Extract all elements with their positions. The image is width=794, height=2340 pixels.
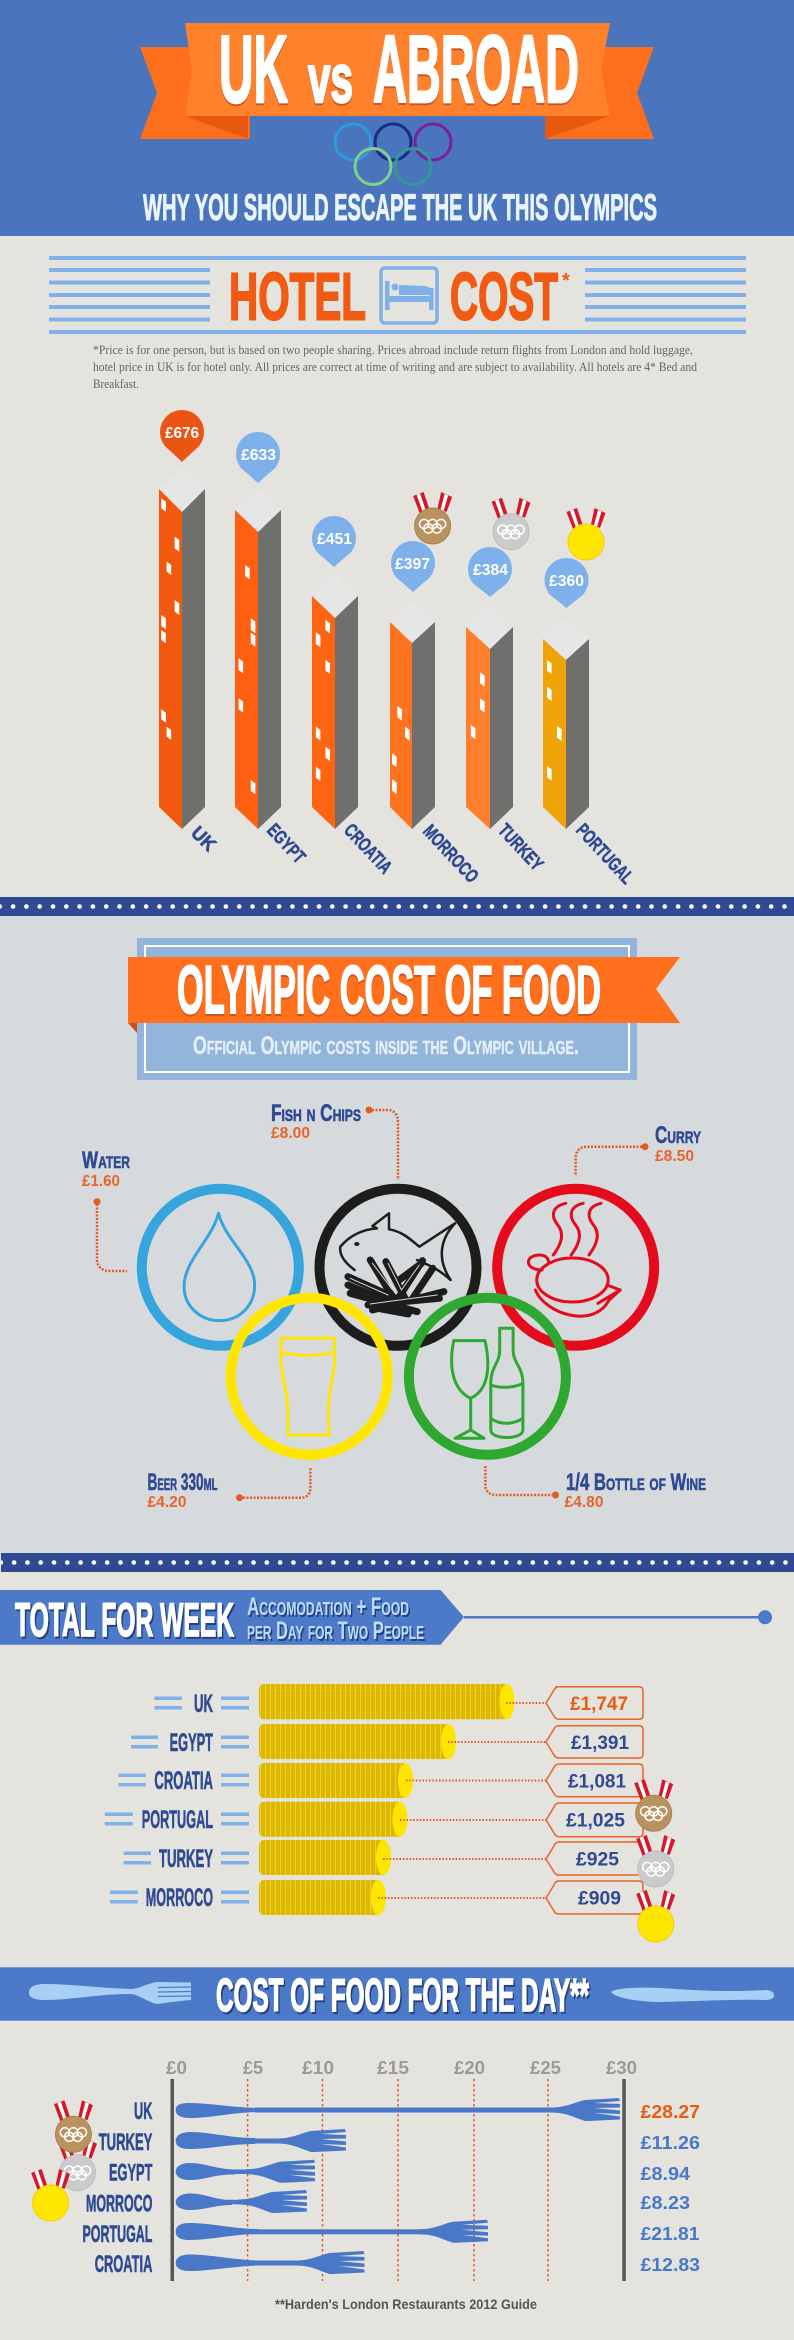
callout line: beer xyxy=(236,1468,310,1501)
axis labels: £30 xyxy=(606,2058,637,2078)
row: Morroco: £909 xyxy=(578,1888,621,1910)
label: wine xyxy=(564,1469,706,1511)
pin: UK £676: £676 xyxy=(165,425,199,442)
row: UK: £28.27 xyxy=(640,2102,700,2122)
pin: Turkey £384 xyxy=(468,547,512,597)
axis labels: countries: UK xyxy=(186,823,220,856)
title xyxy=(219,16,579,123)
title ribbon xyxy=(140,23,654,139)
icon: silver medal xyxy=(58,2139,97,2191)
label: fish n chips: Fish n Chips xyxy=(271,1100,361,1127)
panel: cost of food for the day banner xyxy=(0,1967,794,2021)
row: Croatia xyxy=(95,2251,700,2278)
sub-heading: Official Olympic costs inside the Olympic village. xyxy=(193,1032,579,1060)
row: Portugal: £21.81 xyxy=(640,2224,700,2244)
axis labels: £20 xyxy=(454,2058,485,2078)
row: Egypt: £8.94 xyxy=(640,2164,690,2184)
label: beer: £4.20 xyxy=(148,1494,187,1511)
row: Morroco xyxy=(110,1880,643,1915)
text block: hotel footnote: hotel price in UK is for hotel only. All prices are correct at time of writing and are subject to availability. All hotels are 4* Bed and xyxy=(93,360,698,374)
row: Croatia: £1,081 xyxy=(568,1772,626,1792)
icon: gold medal xyxy=(566,508,606,560)
icon: fork xyxy=(29,1982,191,2004)
row: Portugal: PORTUGAL xyxy=(142,1806,213,1834)
building: Croatia xyxy=(312,574,358,829)
pin: Egypt £633: £633 xyxy=(241,447,276,464)
label: curry xyxy=(655,1122,701,1165)
icon: silver medal xyxy=(492,498,530,550)
row: Turkey xyxy=(99,2129,700,2156)
row: Portugal: £1,025 xyxy=(566,1810,625,1832)
pin: Portugal £360: £360 xyxy=(549,573,584,590)
sub-heading xyxy=(247,1593,424,1645)
panel: total for week banner xyxy=(0,1590,772,1646)
icon: silver medal xyxy=(636,1835,675,1887)
row: UK xyxy=(154,1684,643,1719)
label: beer: Beer 330ml xyxy=(148,1469,218,1496)
row: Portugal xyxy=(82,2220,700,2248)
row: Egypt xyxy=(131,1724,643,1759)
ring: black fish and chips xyxy=(320,1189,476,1346)
ring: red curry xyxy=(497,1189,654,1346)
heading: cost: COST xyxy=(450,260,558,334)
chart: food rings xyxy=(82,1100,706,1511)
label: water: Water xyxy=(82,1147,130,1174)
chart: cost of food forks xyxy=(31,2058,700,2281)
icon: bronze medal xyxy=(413,492,452,544)
pin: Egypt £633 xyxy=(236,432,280,483)
icon: beer glass xyxy=(281,1338,335,1435)
icon: knife xyxy=(611,1988,774,2002)
row: UK: £1,747 xyxy=(570,1694,628,1715)
icon: olympic rings xyxy=(335,124,451,184)
divider band xyxy=(0,897,794,916)
panel: hotel cost heading xyxy=(49,256,746,334)
axis labels: £15 xyxy=(377,2058,409,2078)
ring: green wine xyxy=(409,1298,566,1455)
pin: Croatia £451 xyxy=(312,516,356,567)
title: UK xyxy=(219,16,288,123)
row: Egypt: EGYPT xyxy=(109,2160,153,2187)
axis labels: £0 xyxy=(166,2058,187,2078)
row: Turkey: £11.26 xyxy=(640,2133,700,2153)
sub-heading: Accomodation + Food xyxy=(247,1593,409,1621)
icon: curry xyxy=(528,1203,620,1316)
axis labels: countries: PORTUGAL xyxy=(571,820,637,889)
icon: gold medal xyxy=(636,1890,675,1942)
pin: Morroco £397 xyxy=(391,541,435,592)
building: Morroco xyxy=(390,600,435,829)
text block: hotel footnote: *Price is for one person, but is based on two people sharing. Prices abroad include return flights from London and hold luggage, xyxy=(93,343,693,357)
panel: olympic cost of food heading xyxy=(128,938,680,1080)
row: UK: UK xyxy=(134,2098,153,2125)
row: Portugal: PORTUGAL xyxy=(82,2221,152,2248)
icon: gold medal xyxy=(31,2169,70,2221)
axis labels: £5 xyxy=(243,2058,263,2078)
row: Turkey: £925 xyxy=(576,1850,619,1870)
row: Portugal xyxy=(105,1802,643,1837)
building: Portugal xyxy=(543,617,589,829)
sub-heading: per Day for Two People xyxy=(247,1617,424,1645)
text block: hotel footnote xyxy=(93,343,698,391)
row: UK xyxy=(134,2098,700,2125)
pin: Morroco £397: £397 xyxy=(395,556,430,573)
label: beer xyxy=(148,1469,218,1511)
ribbon xyxy=(128,957,680,1023)
axis labels: countries xyxy=(186,820,637,889)
row: Croatia: CROATIA xyxy=(154,1767,213,1795)
callout line: fish n chips xyxy=(366,1106,398,1180)
row: Morroco: MORROCO xyxy=(146,1884,213,1912)
building: Turkey xyxy=(466,605,513,829)
icon: wine bottle and glass xyxy=(452,1328,523,1438)
row: Egypt: £1,391 xyxy=(571,1733,629,1754)
label: curry: £8.50 xyxy=(655,1148,694,1165)
footnote: **Harden's London Restaurants 2012 Guide xyxy=(275,2296,537,2312)
pin: UK £676 xyxy=(160,410,204,462)
header panel xyxy=(0,0,794,236)
axis labels xyxy=(166,2058,637,2078)
label: fish n chips xyxy=(271,1100,361,1142)
building: Egypt xyxy=(235,488,281,829)
row: Morroco: MORROCO xyxy=(86,2191,152,2218)
row: Egypt: EGYPT xyxy=(170,1729,213,1757)
row: UK: UK xyxy=(194,1690,213,1718)
header panel: ABROAD xyxy=(373,16,579,123)
axis labels: countries: TURKEY xyxy=(493,820,547,876)
title: vs xyxy=(308,41,353,117)
label: fish n chips: £8.00 xyxy=(271,1125,310,1142)
chart: hotel cost buildings xyxy=(159,410,637,889)
ring: blue water xyxy=(142,1189,299,1346)
row: Turkey: TURKEY xyxy=(159,1845,213,1873)
row: Morroco xyxy=(86,2190,690,2218)
pin: Portugal £360 xyxy=(544,558,588,608)
heading: TOTAL FOR WEEK xyxy=(15,1593,234,1646)
row: Turkey: TURKEY xyxy=(99,2129,152,2156)
label: wine: £4.80 xyxy=(564,1494,604,1511)
label: curry: Curry xyxy=(655,1122,701,1149)
chart: total for week coin bars xyxy=(105,1684,675,1942)
asterisk: * xyxy=(562,270,570,292)
icon: fish and chips xyxy=(340,1213,455,1314)
callout line: wine xyxy=(485,1466,559,1498)
icon: bed xyxy=(381,268,437,323)
label: water: £1.60 xyxy=(82,1173,120,1190)
row: Croatia: £12.83 xyxy=(640,2255,700,2275)
heading: hotel: HOTEL xyxy=(229,260,366,334)
pin: Croatia £451: £451 xyxy=(317,531,352,548)
icon: bronze medal xyxy=(54,2100,93,2152)
ring: yellow beer xyxy=(231,1298,388,1455)
divider band xyxy=(1,1553,794,1572)
row: Egypt xyxy=(109,2160,690,2187)
axis labels: countries: MORROCO xyxy=(418,821,482,887)
row: Croatia xyxy=(118,1763,643,1798)
callout line: curry xyxy=(576,1143,648,1176)
axis labels: countries: CROATIA xyxy=(339,820,396,878)
row: Croatia: CROATIA xyxy=(95,2251,152,2278)
building: UK xyxy=(159,467,205,829)
icon: bronze medal xyxy=(634,1779,673,1831)
row: Turkey xyxy=(124,1840,643,1875)
axis labels: £25 xyxy=(530,2058,561,2078)
row: Morroco: £8.23 xyxy=(640,2193,690,2213)
axis labels: £10 xyxy=(302,2058,334,2078)
axis labels: countries: EGYPT xyxy=(262,820,309,868)
callout line: water xyxy=(94,1198,127,1271)
text block: hotel footnote: Breakfast. xyxy=(93,377,139,391)
pin: Turkey £384: £384 xyxy=(473,562,508,579)
icon: water drop xyxy=(184,1213,255,1321)
label: water xyxy=(82,1147,130,1190)
label: wine: 1/4 Bottle of Wine xyxy=(566,1469,706,1496)
